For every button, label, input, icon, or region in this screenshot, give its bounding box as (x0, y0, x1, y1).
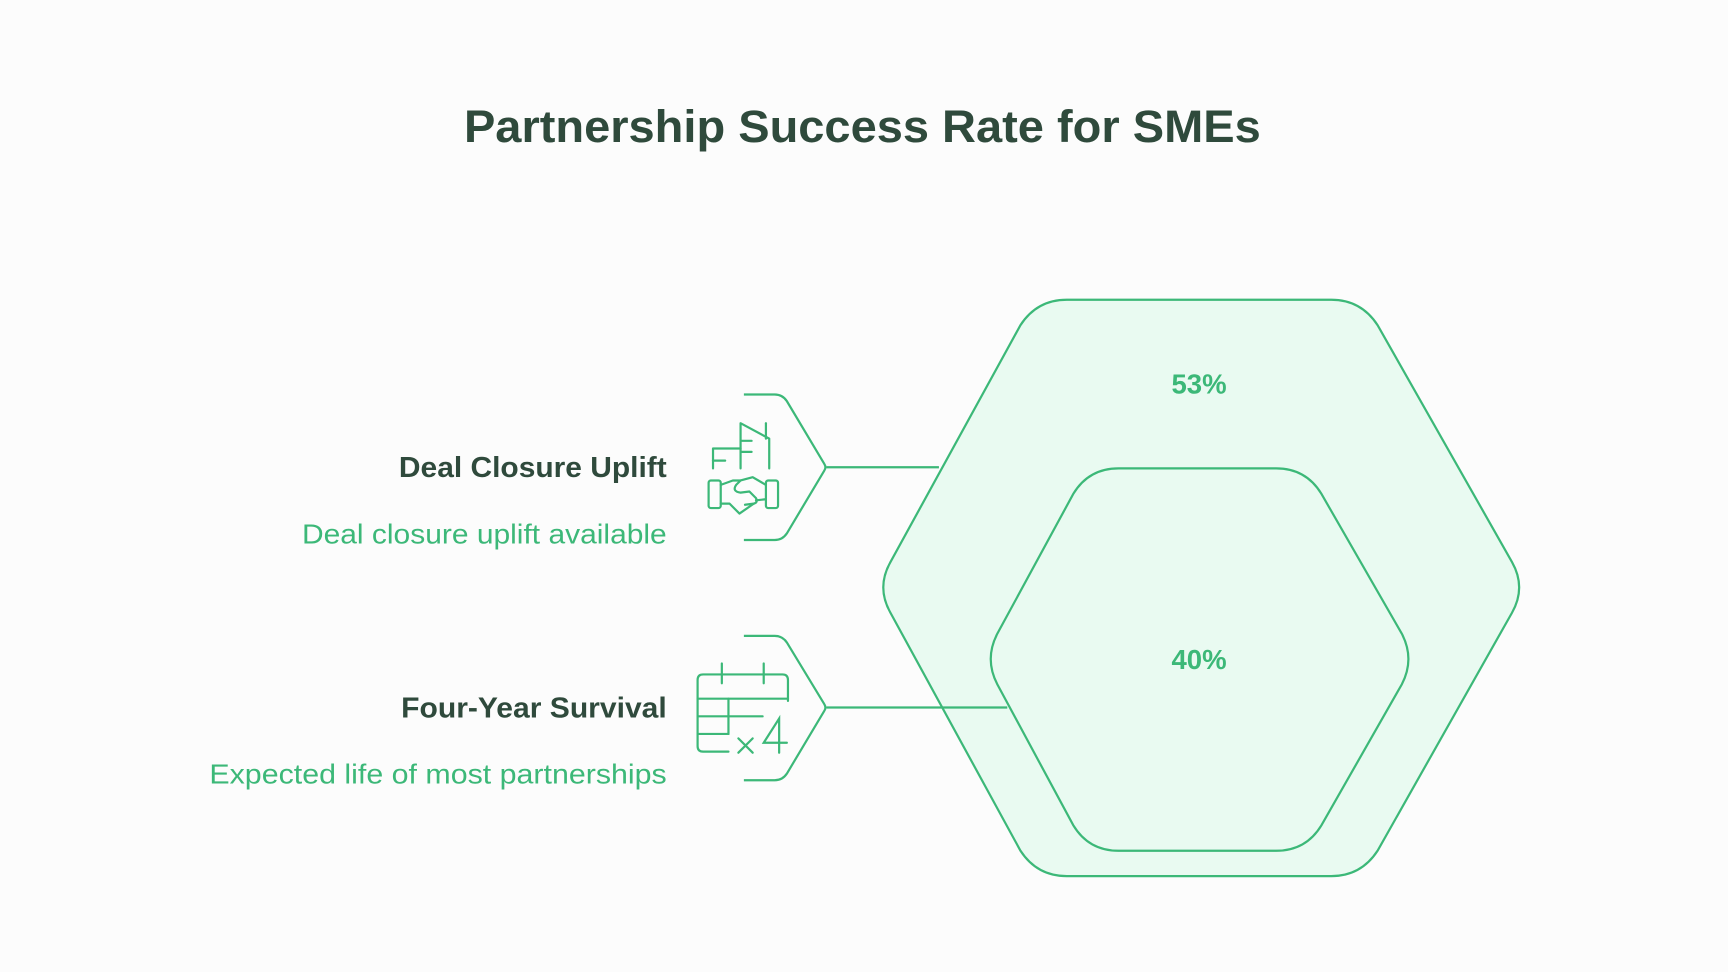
icon: calendar x4 (698, 663, 788, 753)
inner hexagon: 40% (991, 468, 1408, 851)
bracket: deal closure (744, 395, 825, 540)
text block: deal closure uplift: Deal closure uplift available (302, 518, 667, 549)
title: Partnership Success Rate for SMEs (464, 101, 1261, 152)
bracket: four-year survival (744, 636, 825, 780)
label: 40%: 40% (1171, 644, 1227, 675)
text block: four-year survival: Expected life of most partnerships (209, 759, 667, 790)
text block: four-year survival (209, 692, 667, 790)
text block: deal closure uplift: Deal Closure Uplift (399, 452, 667, 484)
outer hexagon: 53% (883, 300, 1519, 876)
text block: deal closure uplift (302, 452, 667, 549)
label: 53%: 53% (1171, 368, 1227, 399)
text block: four-year survival: Four-Year Survival (401, 692, 667, 724)
connector lines (827, 467, 1007, 708)
icon: handshake with buildings (709, 423, 778, 514)
